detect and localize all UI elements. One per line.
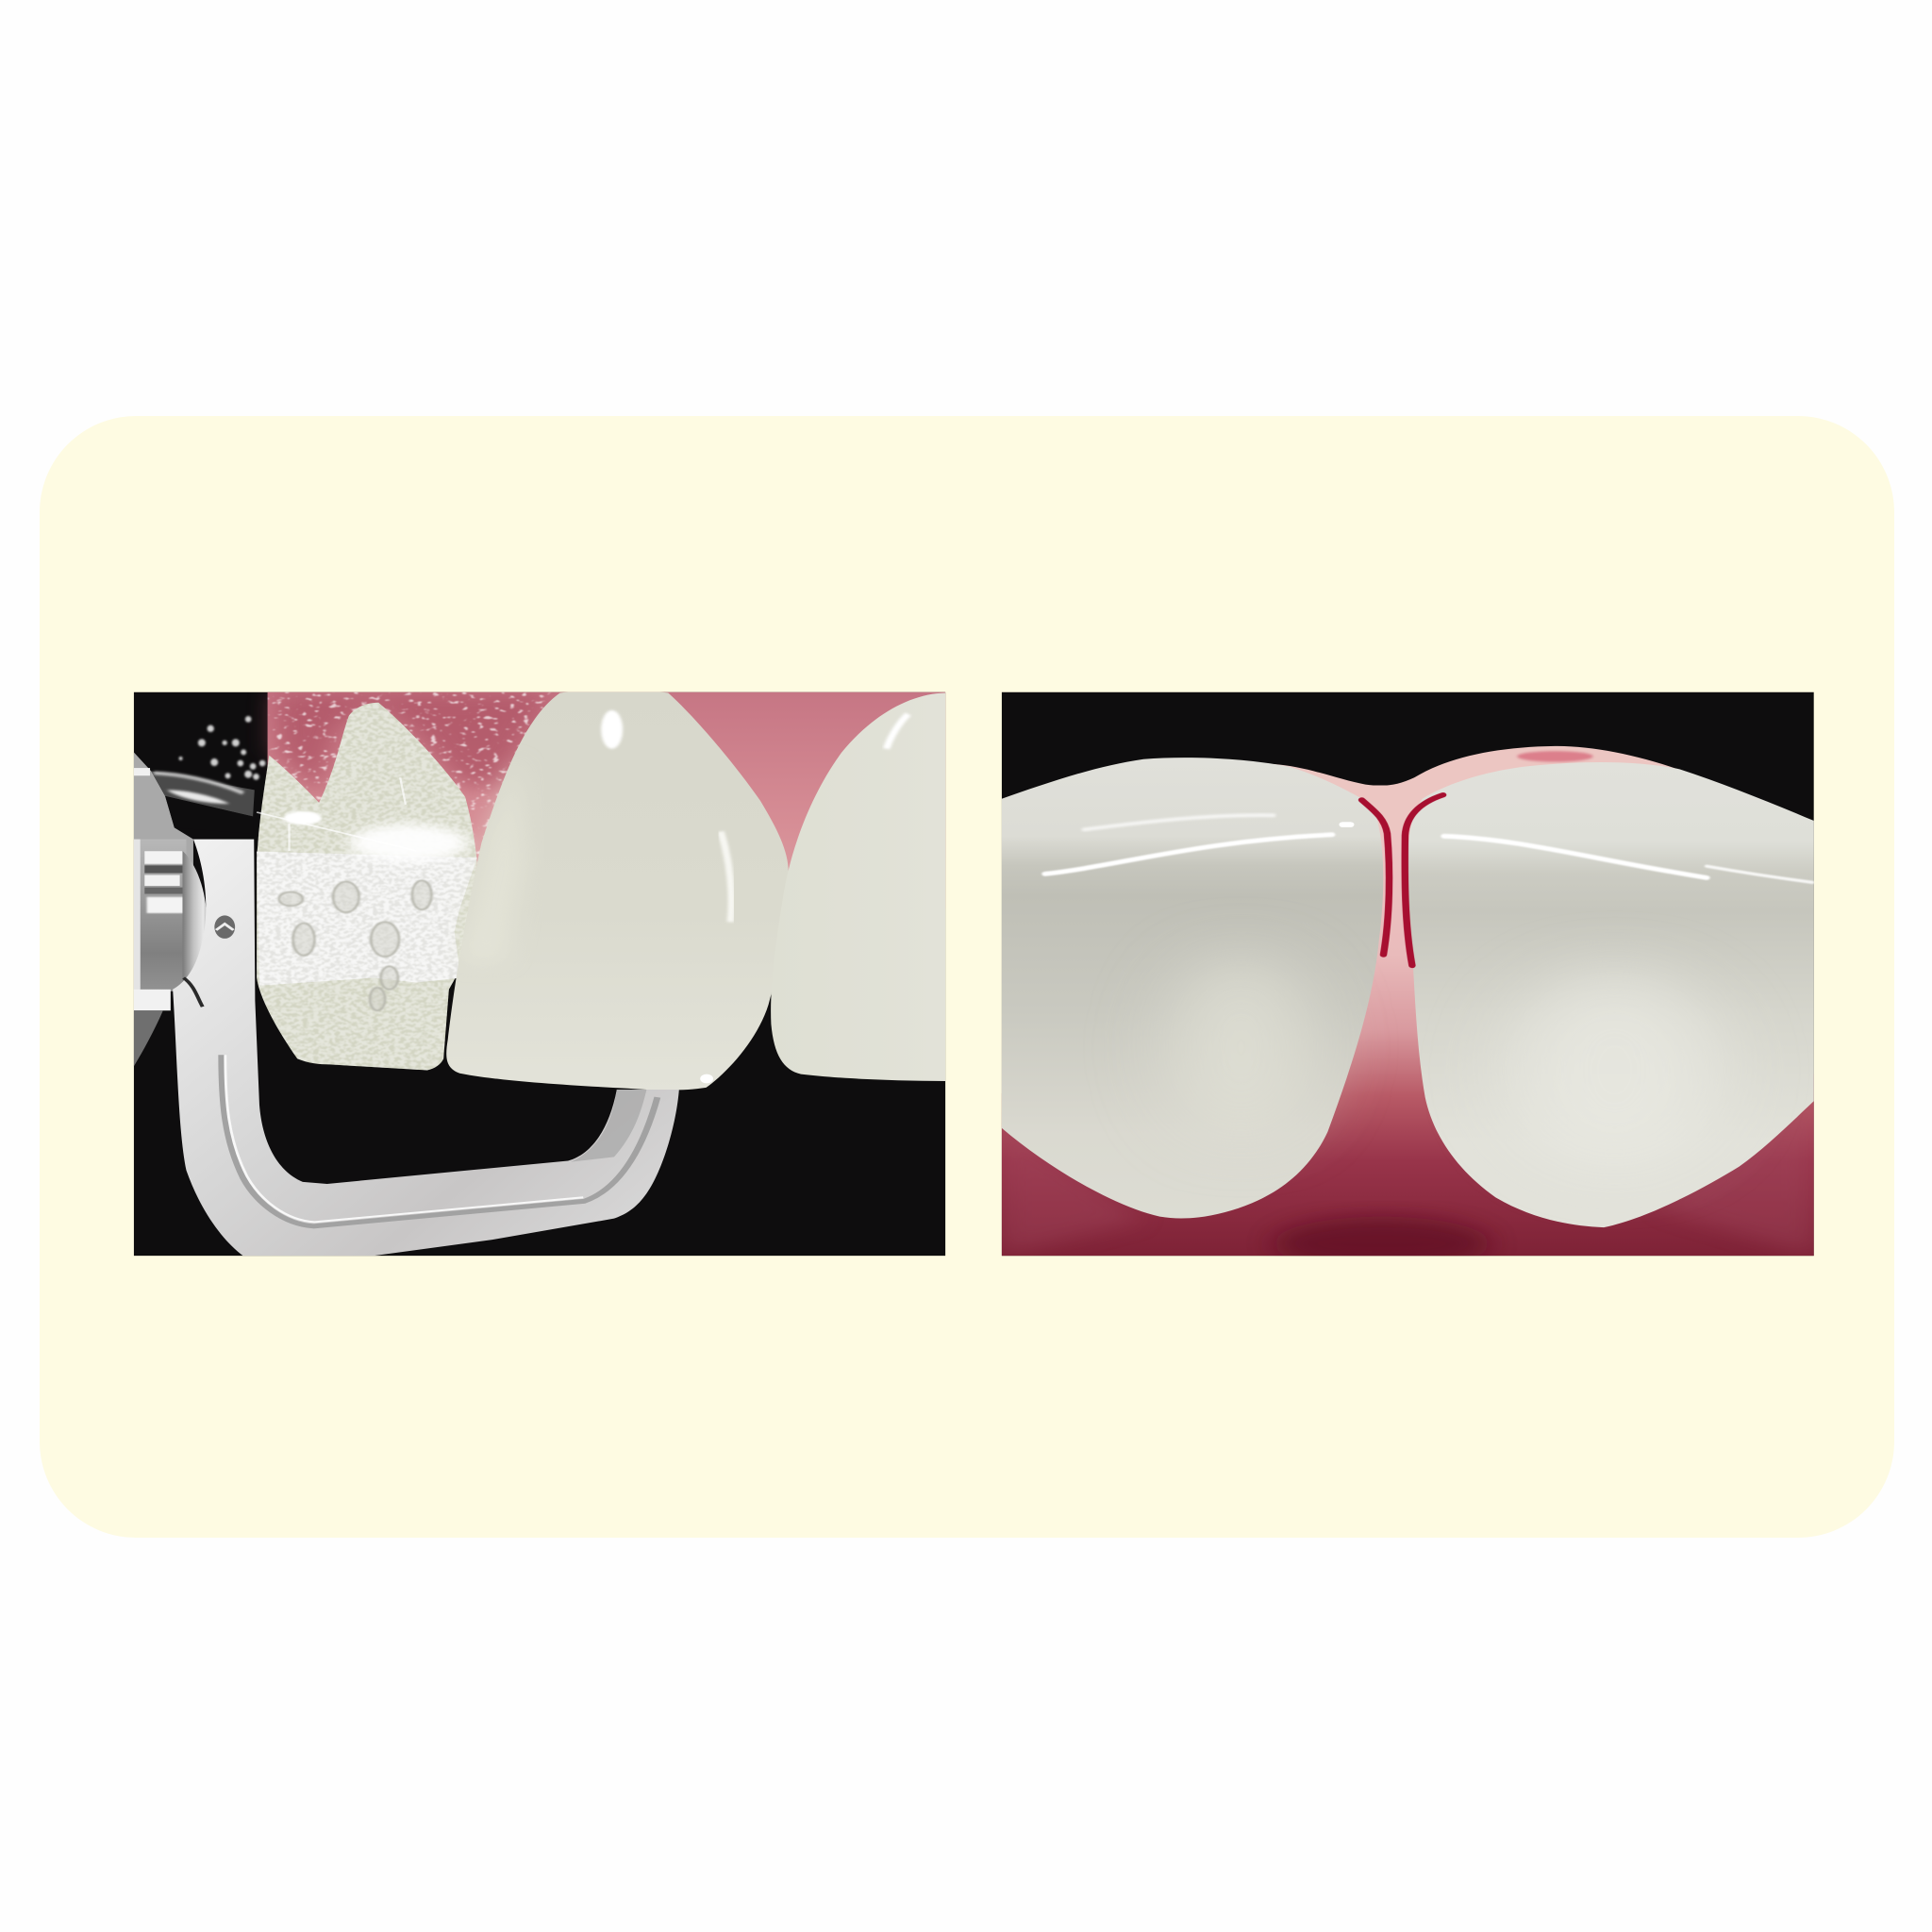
powder specks xyxy=(254,701,481,1074)
upper gloss line xyxy=(1084,815,1274,829)
handpiece top wedge xyxy=(134,752,193,990)
red contact outline xyxy=(1362,795,1443,965)
handpiece metal head xyxy=(134,752,255,1066)
droplet xyxy=(371,922,399,957)
right tooth xyxy=(1407,762,1814,1227)
ring upper shaded inner edge xyxy=(571,1090,646,1162)
contact gap highlight xyxy=(1389,940,1404,962)
photo background xyxy=(1002,692,1814,1256)
ring dark band xyxy=(144,888,182,894)
prepared lateral tooth xyxy=(257,703,477,1071)
right tooth glow xyxy=(1507,970,1723,1171)
droplet xyxy=(370,988,385,1010)
pink gum rim above teeth xyxy=(1274,746,1682,831)
lower gloss line xyxy=(1045,835,1332,874)
ring dark band xyxy=(144,865,182,874)
spray particles on the black background xyxy=(179,716,265,780)
dark cavity under jet xyxy=(165,796,253,828)
gum tissue xyxy=(268,692,945,874)
ring body xyxy=(141,840,186,991)
ring clip hook xyxy=(184,978,203,1007)
papilla gap highlight xyxy=(1386,990,1396,1053)
ring groove highlight xyxy=(225,1055,583,1222)
sparkle streak xyxy=(257,777,416,851)
ring white band xyxy=(147,897,185,913)
droplet xyxy=(381,966,398,990)
corner glint xyxy=(1342,818,1350,831)
panel: cream background card xyxy=(40,416,1894,1538)
left red curve xyxy=(1362,800,1390,955)
strip grit xyxy=(254,851,481,986)
ring outer light edge xyxy=(134,840,141,991)
handpiece lower collar xyxy=(134,990,171,1010)
droplet xyxy=(333,882,359,912)
ring screw xyxy=(214,915,235,939)
central incisor tip glint xyxy=(700,1074,713,1083)
matrix holder ring xyxy=(173,840,679,1256)
friction flash xyxy=(349,824,468,862)
handpiece bright top strip xyxy=(134,768,150,775)
left tooth xyxy=(1002,758,1383,1218)
water jet xyxy=(167,790,229,804)
dark gum shadow xyxy=(1274,1217,1491,1271)
photo: tooth contact outline on the right xyxy=(1002,692,1814,1271)
droplet xyxy=(279,892,303,906)
abrasive strip grain xyxy=(254,851,481,986)
second water jet xyxy=(154,773,243,793)
ring inner groove xyxy=(222,1055,658,1226)
gum side tint xyxy=(1002,1093,1814,1256)
edge gloss line xyxy=(1707,866,1812,882)
powder texture on lateral tooth xyxy=(254,701,481,1074)
photo: stripping procedure on the left xyxy=(134,691,945,1256)
right tooth gloss lines xyxy=(1444,836,1812,882)
handpiece shadow xyxy=(134,1010,163,1066)
ring white band xyxy=(144,851,182,864)
left tooth glow xyxy=(1171,955,1311,1140)
central incisor translucent edge xyxy=(459,755,525,962)
handpiece dome xyxy=(182,851,208,988)
central incisor side highlight xyxy=(721,831,731,922)
tooth soft lights xyxy=(1171,955,1723,1171)
photo background xyxy=(134,692,945,1256)
right red curve xyxy=(1405,795,1443,965)
water droplets on strip xyxy=(279,880,432,1010)
screw head xyxy=(214,915,235,939)
droplet xyxy=(293,924,315,956)
small glint xyxy=(284,811,322,825)
gum dark upper shading xyxy=(275,692,552,797)
spray on the gum xyxy=(268,692,562,854)
gum tissue xyxy=(1002,785,1814,1256)
gum blush xyxy=(1517,751,1593,762)
central incisor xyxy=(446,691,789,1091)
water channel xyxy=(151,771,255,817)
droplet xyxy=(412,880,432,909)
abrasive strip xyxy=(257,852,477,986)
main gloss line xyxy=(1444,836,1707,877)
screw slot xyxy=(216,924,233,930)
neighbouring incisor xyxy=(771,692,945,1081)
central incisor highlight xyxy=(601,710,623,749)
ring white band xyxy=(144,875,180,886)
neighbouring incisor highlight xyxy=(887,714,908,749)
left tooth gloss lines xyxy=(1045,815,1350,874)
